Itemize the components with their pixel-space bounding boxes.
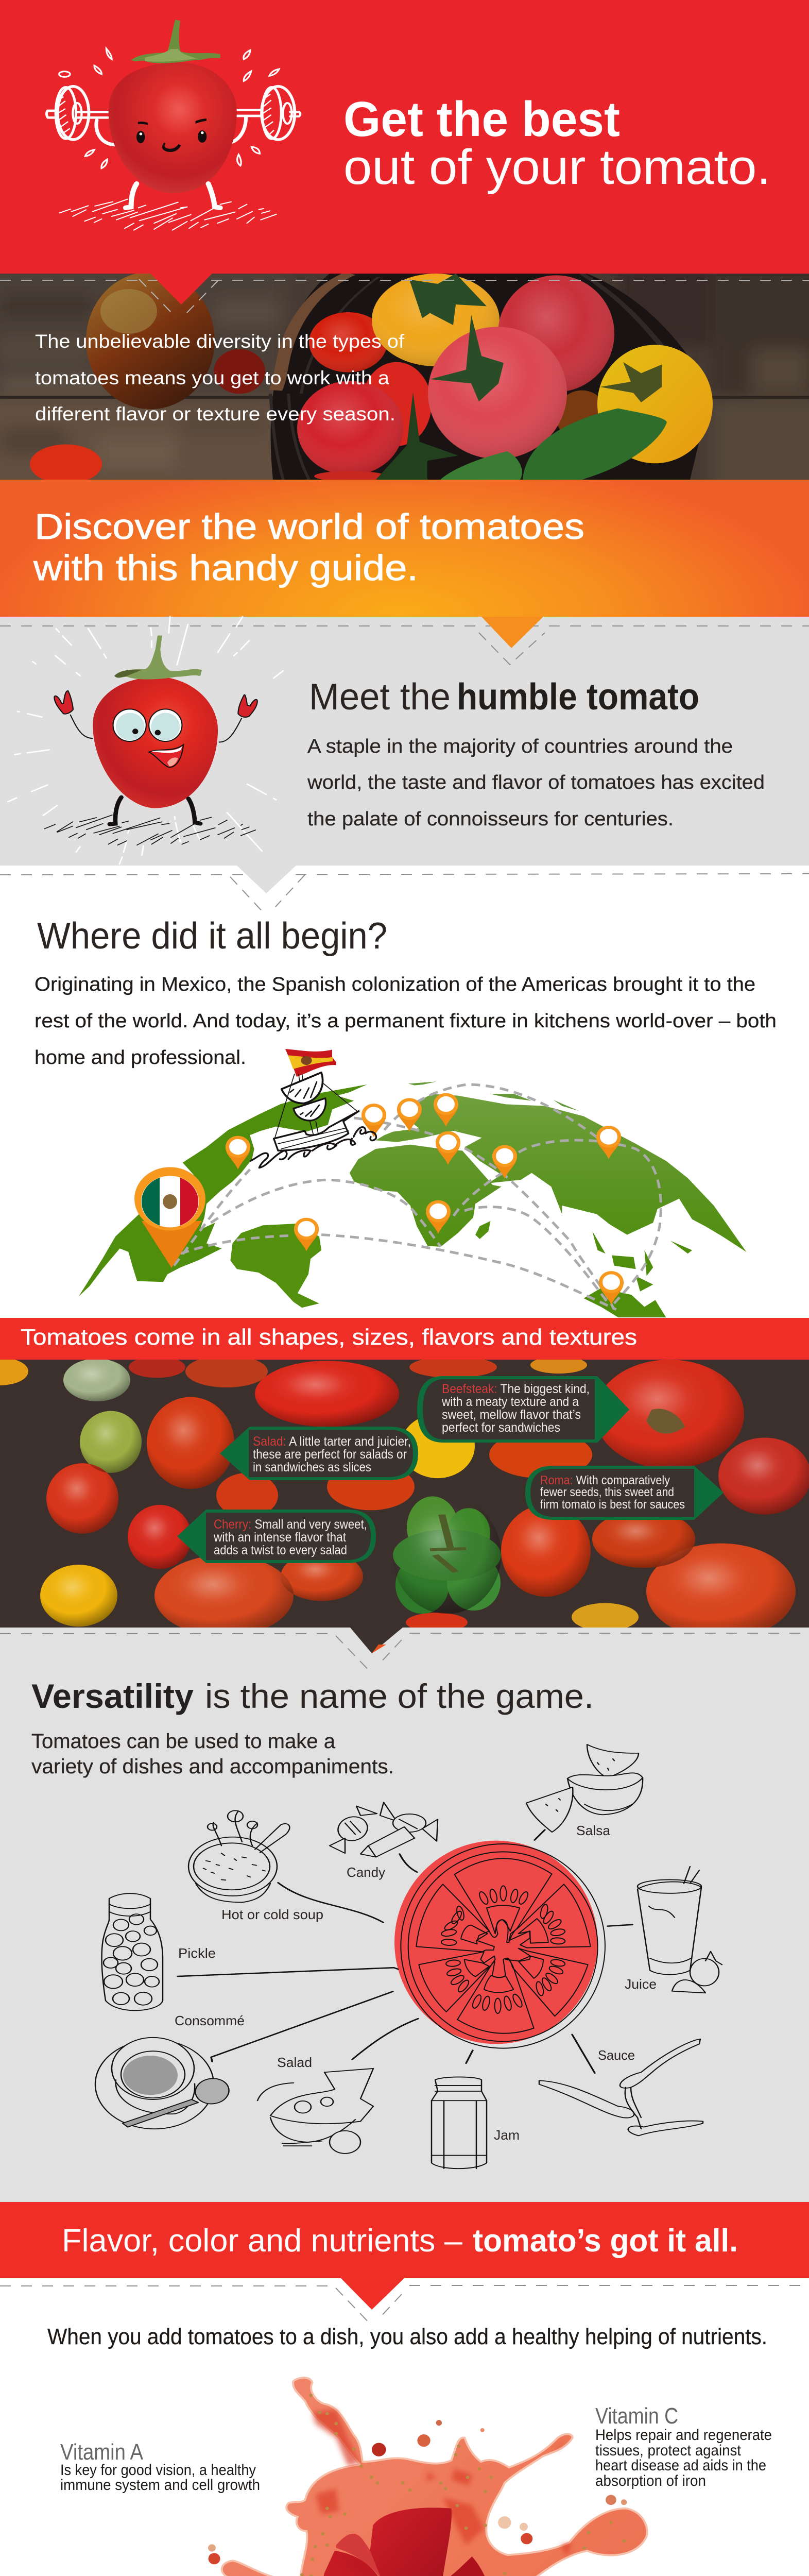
- food labels: Salsa: [576, 1823, 611, 1838]
- intro text: [35, 331, 405, 425]
- callout: beefsteak: sweet, mellow flavor that’s: [442, 1408, 581, 1422]
- callout: cherry: [177, 1510, 376, 1563]
- callout: salad: in sandwiches as slices: [253, 1460, 371, 1475]
- nutrient: vitamin C: tissues, protect against: [595, 2442, 742, 2459]
- illustration: sailing ship with Spanish flag: [251, 1049, 376, 1168]
- nutrient: vitamin C: Vitamin C: [595, 2403, 678, 2429]
- panel: where did it all begin: [0, 866, 809, 2576]
- arms and hands: [54, 691, 257, 742]
- nutrient: vitamin A: immune system and cell growth: [60, 2477, 260, 2494]
- panel: hero header: [0, 0, 809, 274]
- nutrient: vitamin C: heart disease ad aids in the: [595, 2457, 766, 2474]
- description: the palate of connoisseurs for centuries.: [307, 808, 674, 830]
- callout: salad: Salad: A little tarter and juicier,: [253, 1434, 411, 1449]
- heading: Where did it all begin?: [37, 916, 387, 957]
- banner heading: Flavor, color and nutrients –: [62, 2223, 463, 2259]
- continents: [79, 1081, 746, 1317]
- callout: beefsteak: perfect for sandwiches: [442, 1420, 560, 1435]
- tomatoes: [0, 1355, 809, 1639]
- droplets: [203, 2420, 627, 2576]
- face: [136, 118, 206, 152]
- plank gaps: [0, 396, 809, 399]
- lead sentence: When you add tomatoes to a dish, you also add a healthy helping of nutrients.: [47, 2324, 767, 2349]
- tomato body: [109, 62, 237, 193]
- callout: cherry: with an intense flavor that: [213, 1530, 346, 1545]
- heading continuation: is the name of the game.: [205, 1677, 594, 1715]
- green heirloom tomato: [393, 1496, 501, 1614]
- food labels: Hot or cold soup: [221, 1907, 323, 1922]
- title: Get the best: [343, 92, 620, 147]
- banner heading: Discover the world of tomatoes: [35, 506, 584, 547]
- ground scratches: [59, 199, 277, 230]
- radiating lines: [8, 617, 283, 864]
- panel: tomato varieties header: [0, 1318, 809, 1360]
- leaves and stems: [376, 274, 667, 480]
- Mexico flag pin: [134, 1167, 205, 1268]
- callout: salad: these are perfect for salads or: [253, 1447, 407, 1462]
- title: out of your tomato.: [343, 140, 771, 195]
- sails and hull: [251, 1073, 376, 1168]
- stem and calyx: [131, 20, 220, 63]
- icon: salsa and chips: [526, 1744, 643, 1832]
- dashed line and arrow: [0, 274, 809, 315]
- food labels: Juice: [625, 1976, 657, 1992]
- connector lines: [178, 1830, 632, 2073]
- nutrient: vitamin C: [595, 2403, 772, 2489]
- icon: sauce spoons: [539, 2039, 703, 2136]
- flag: [285, 1049, 336, 1077]
- subheading: [31, 1730, 394, 1778]
- callout: cherry: adds a twist to every salad: [214, 1543, 347, 1557]
- illustration: rocking tomato: [8, 617, 283, 864]
- nutrient: vitamin A: Vitamin A: [60, 2439, 144, 2465]
- wood planks and tomatoes: [0, 274, 809, 480]
- tomato shading: [40, 1359, 809, 1639]
- icon: juice glass: [638, 1867, 722, 1993]
- panel: basket of tomatoes photo: [0, 274, 809, 480]
- inner lobes: [487, 1905, 520, 1934]
- wedges: [455, 1858, 552, 1942]
- intro text: tomatoes means you get to work with a: [35, 367, 389, 388]
- splat darker pulp: [277, 2410, 581, 2576]
- callout: salad: [220, 1427, 418, 1480]
- panel: nutrients: [47, 2324, 788, 2576]
- description: A staple in the majority of countries around the: [307, 736, 733, 757]
- callout: roma: Roma: With comparatively: [540, 1473, 670, 1487]
- icon: pickle jar: [102, 1893, 163, 2010]
- splat: [222, 2378, 647, 2576]
- icon: soup bowl: [188, 1810, 289, 1902]
- callout: roma: [525, 1466, 724, 1520]
- food labels: Consommé: [175, 2013, 245, 2028]
- food labels: Candy: [347, 1865, 385, 1880]
- icon: candy: [330, 1802, 438, 1857]
- basket: [270, 274, 711, 480]
- tomato flesh lobes: [321, 2507, 493, 2576]
- callout: beefsteak: with a meaty texture and a: [441, 1395, 579, 1409]
- illustration: squashed tomato splat: [203, 2378, 647, 2576]
- body copy: Originating in Mexico, the Spanish colonization of the Americas brought it to the: [35, 974, 755, 995]
- food labels: [175, 1823, 657, 2143]
- world map: [79, 1049, 746, 1317]
- seeds: [256, 2394, 626, 2576]
- icon: consomme cup: [95, 2038, 235, 2129]
- stem and calyx: [114, 636, 202, 680]
- body: [93, 677, 218, 808]
- nutrient: vitamin C: absorption of iron: [595, 2472, 706, 2489]
- illustration: weightlifting tomato: [47, 20, 300, 230]
- callout: roma: fewer seeds, this sweet and: [540, 1485, 674, 1499]
- panel: nutrients banner: [0, 2202, 809, 2326]
- legs: [126, 184, 220, 208]
- subheading: Tomatoes can be used to make a: [31, 1730, 336, 1753]
- panel: tomato varieties photo: [0, 1355, 809, 1639]
- intro text: The unbelievable diversity in the types of: [35, 331, 405, 352]
- tomatoes: [30, 272, 713, 484]
- icon: salad bowl: [257, 2069, 373, 2154]
- sweat drops: [59, 48, 279, 168]
- ground scratches: [44, 815, 255, 845]
- beefsteak crown: [646, 1409, 685, 1434]
- nutrient: vitamin A: Is key for good vision, a healthy: [60, 2462, 256, 2479]
- barbell: [47, 87, 300, 145]
- location pins: [226, 1093, 624, 1304]
- panel: orange guide banner: [0, 480, 809, 617]
- intro text: different flavor or texture every season.: [35, 403, 395, 425]
- heading: Versatility: [31, 1677, 194, 1715]
- mouth: [149, 744, 183, 768]
- callout: beefsteak: Beefsteak: The biggest kind,: [442, 1382, 590, 1396]
- description: [307, 736, 765, 830]
- legs: [110, 798, 200, 824]
- callout: roma: firm tomato is best for sauces: [540, 1498, 685, 1512]
- section heading: Tomatoes come in all shapes, sizes, flavors and textures: [21, 1325, 637, 1350]
- callout: beefsteak: [417, 1376, 629, 1443]
- section dividers: [0, 866, 809, 914]
- callout: cherry: Cherry: Small and very sweet,: [214, 1517, 367, 1532]
- humble tomato heading: humble tomato: [457, 676, 699, 718]
- title: [343, 92, 771, 195]
- wood texture: [0, 274, 809, 480]
- banner heading: [33, 506, 584, 588]
- food labels: Sauce: [598, 2047, 635, 2063]
- nutrient: vitamin C: Helps repair and regenerate: [595, 2427, 772, 2444]
- food labels: Pickle: [178, 1945, 216, 1961]
- banner heading bold: tomato’s got it all.: [473, 2223, 738, 2259]
- food labels: Salad: [277, 2055, 312, 2070]
- subheading: variety of dishes and accompaniments.: [31, 1755, 394, 1778]
- seeds: [478, 1890, 490, 1906]
- icon: jam jar: [432, 2077, 487, 2168]
- tomato slice wheel: [394, 1841, 605, 2048]
- panel: versatility: [0, 1628, 809, 2202]
- dashed routes: [174, 1084, 661, 1310]
- body copy: home and professional.: [35, 1047, 246, 1069]
- eyes: [113, 709, 182, 741]
- panel: meet the humble tomato: [0, 617, 809, 866]
- body copy: [35, 974, 777, 1069]
- nutrient: vitamin A: [60, 2439, 260, 2494]
- meet heading: Meet the: [309, 676, 451, 718]
- banner heading: with this handy guide.: [33, 548, 418, 588]
- body copy: rest of the world. And today, it’s a permanent fixture in kitchens world-over – both: [35, 1010, 777, 1032]
- description: world, the taste and flavor of tomatoes has excited: [307, 772, 765, 793]
- food illustrations: [95, 1744, 722, 2168]
- food labels: Jam: [494, 2127, 520, 2143]
